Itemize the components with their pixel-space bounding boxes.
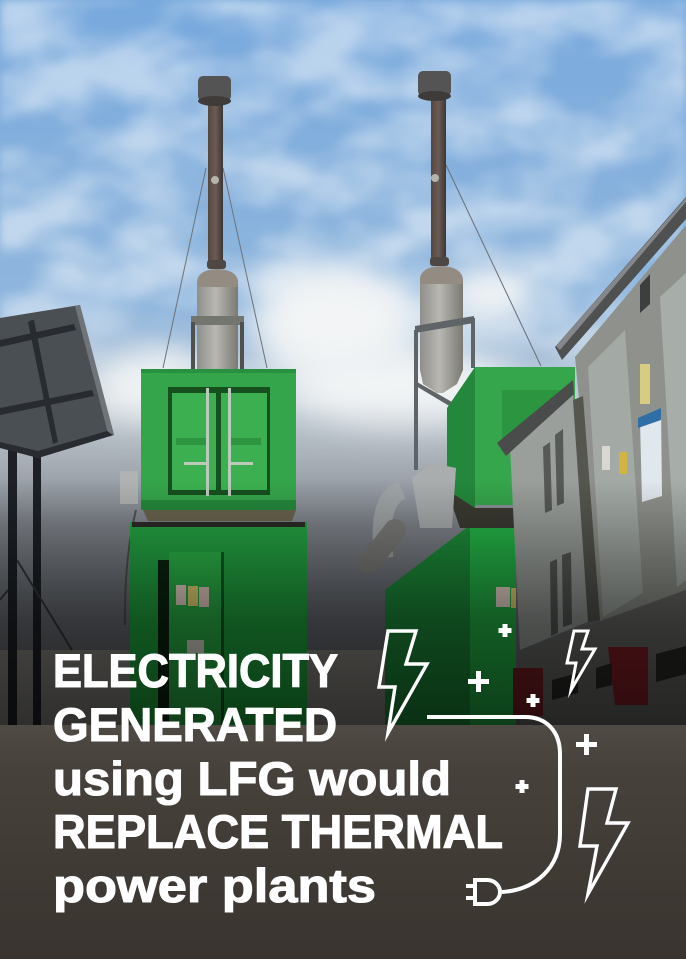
- sky with clouds: [0, 0, 686, 730]
- upper green container left: [141, 369, 296, 521]
- icon: small lightning bolt top right: [567, 631, 595, 690]
- icon: cable with plug: [427, 717, 560, 904]
- headline text: GENERATED: [53, 698, 337, 751]
- distant low building: [0, 650, 400, 725]
- solar canopy left: [0, 305, 114, 725]
- darkening overlay: [0, 480, 686, 725]
- headline text: ELECTRICITY: [53, 644, 338, 697]
- headline text: REPLACE THERMAL: [53, 805, 503, 858]
- lower green container left: [130, 522, 307, 725]
- stack right: [414, 71, 541, 470]
- headline text: power plants: [53, 859, 376, 912]
- grey buildings right: [497, 197, 686, 725]
- icon: large lightning bolt top left: [379, 631, 427, 733]
- green containers right: [370, 367, 575, 725]
- ground: [0, 725, 686, 959]
- AC unit left: [120, 471, 138, 625]
- icon: sparkle plus signs: [468, 624, 597, 793]
- stack left: [163, 76, 267, 370]
- headline text: [53, 644, 503, 912]
- icon: large lightning bolt bottom right: [580, 789, 628, 894]
- headline text: using LFG would: [53, 752, 451, 805]
